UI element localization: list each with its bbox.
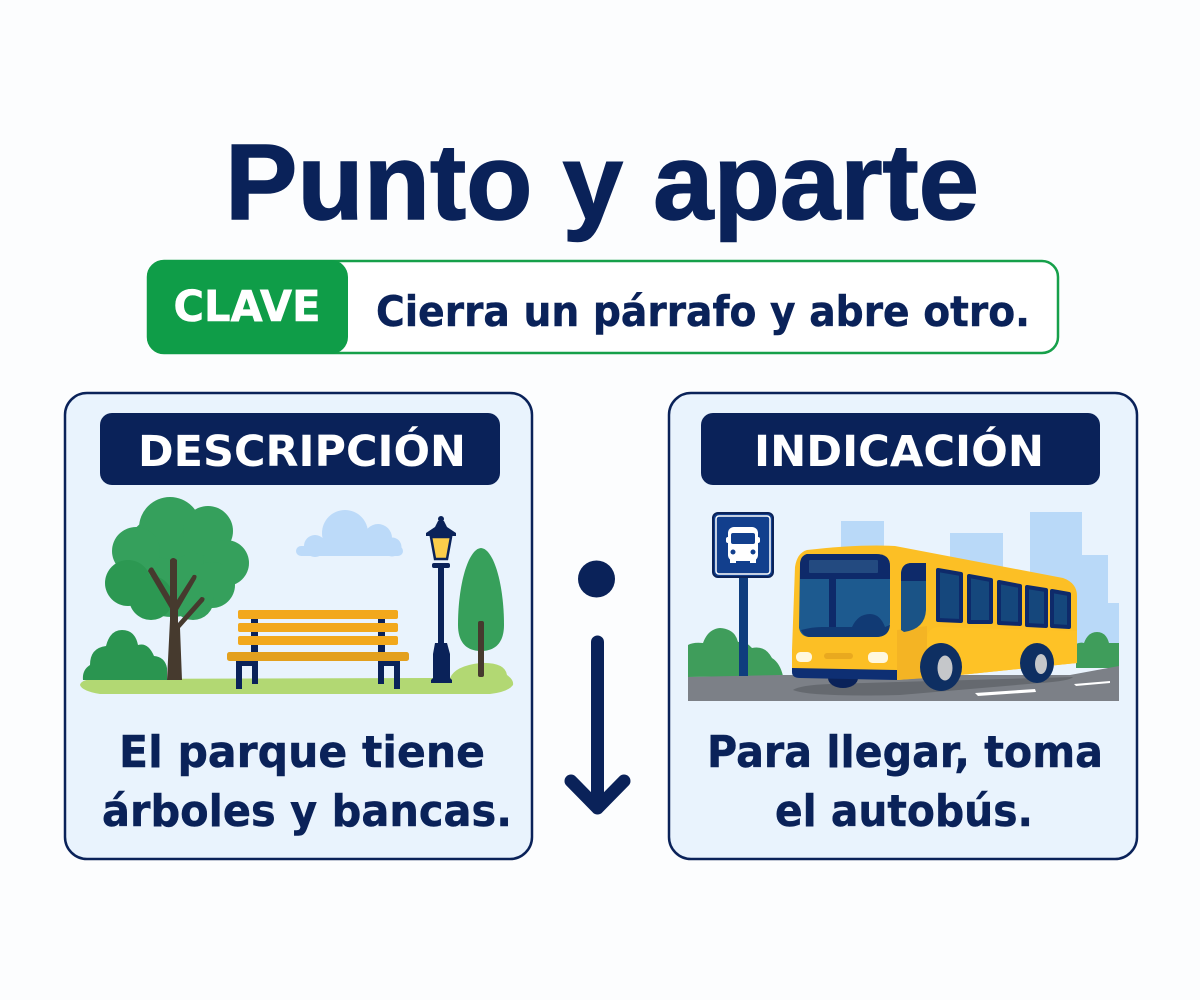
icon: bus: [726, 527, 760, 563]
bus stop sign: [713, 513, 773, 676]
cypress tree: [458, 548, 504, 677]
bench: [227, 610, 409, 689]
panel text: descripción: El parque tiene: [119, 727, 485, 778]
heading: indicación: [701, 413, 1100, 485]
panel text: descripción: árboles y bancas.: [102, 786, 512, 837]
cloud: [296, 510, 403, 557]
panel: indicación: [669, 393, 1137, 859]
panel text: descripción: [102, 727, 512, 837]
panel text: indicación: Para llegar, toma: [707, 727, 1103, 778]
heading: descripción: DESCRIPCIÓN: [138, 426, 466, 477]
lane marks: [975, 681, 1110, 696]
tree: [105, 497, 249, 680]
arrow: [571, 642, 624, 808]
headlights: [796, 652, 812, 662]
heading: descripción: [100, 413, 500, 485]
door panel: [897, 626, 927, 680]
bus shadow: [793, 677, 1073, 695]
door window: [901, 563, 926, 632]
side windows: [938, 570, 1069, 627]
title: Punto y aparte: [225, 121, 979, 242]
bush: [83, 630, 167, 680]
panel text: indicación: el autobús.: [775, 786, 1033, 837]
street lamp: [426, 516, 456, 683]
heading: indicación: INDICACIÓN: [754, 426, 1044, 477]
panel: descripción: [65, 393, 532, 859]
bus: [792, 546, 1077, 691]
ground: [80, 663, 513, 694]
CLAVE badge: [147, 260, 348, 354]
bushes: [688, 628, 1119, 677]
key message banner: [147, 260, 1058, 354]
CLAVE badge: CLAVE: [174, 282, 320, 332]
illustration: bus stop: [688, 512, 1119, 701]
bumper: [792, 668, 897, 680]
city skyline: [841, 512, 1119, 650]
illustration: park: [80, 497, 513, 694]
wheels: [920, 643, 1054, 691]
key sentence: Cierra un párrafo y abre otro.: [376, 287, 1030, 336]
windshield: [799, 554, 890, 637]
symbol: period and down arrow: [571, 560, 624, 808]
period dot: [578, 560, 615, 598]
road: [688, 666, 1119, 701]
panel text: indicación: [707, 727, 1103, 837]
